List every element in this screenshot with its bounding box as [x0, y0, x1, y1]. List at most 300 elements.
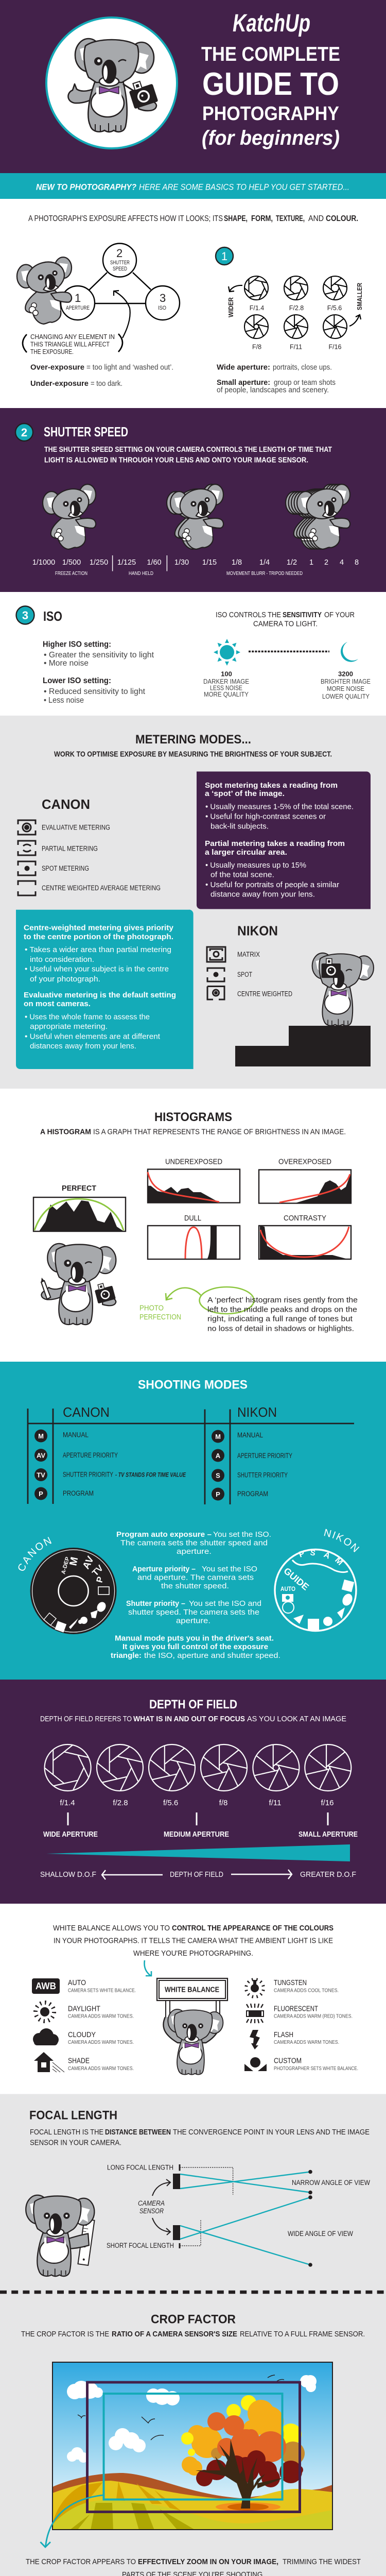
- shutter speed scale: 1/15: [202, 558, 217, 567]
- ISO settings list: • Reduced sensitivity to light: [44, 687, 146, 696]
- icon: shade house: [34, 2052, 64, 2072]
- over and under exposure text: Under-exposure: [30, 380, 89, 388]
- ISO sensitivity note: CAMERA TO LIGHT.: [253, 619, 318, 629]
- panel: metering modes: [0, 716, 386, 1089]
- ISO 3200 labels: [321, 670, 371, 700]
- callout: centre-weighted and evaluative metering: • Uses the whole frame to assess the: [25, 1013, 150, 1021]
- crop factor note: TRIMMING THE WIDEST: [283, 2557, 361, 2566]
- callout: centre-weighted and evaluative metering: into consideration.: [30, 956, 94, 964]
- crop factor illustration: [40, 2362, 333, 2547]
- main title: PHOTOGRAPHY: [202, 103, 339, 125]
- white balance intro: [53, 1924, 334, 1958]
- f-stop labels: f/2.8: [113, 1799, 128, 1807]
- icon: auto white balance: [32, 1978, 60, 1994]
- aperture grid: F/11: [290, 343, 302, 350]
- aperture grid: F/8: [252, 343, 261, 350]
- shutter description: LIGHT IS ALLOWED IN THROUGH YOUR LENS AND ONTO YOUR IMAGE SENSOR.: [44, 455, 308, 465]
- mode descriptions: You set the ISO: [202, 1565, 257, 1573]
- callout: spot and partial metering: back-lit subjects.: [210, 823, 269, 831]
- f-stop labels: f/5.6: [163, 1799, 178, 1807]
- step badge 3: [16, 606, 34, 624]
- header panel: [0, 0, 386, 173]
- modes table: M: [38, 1432, 44, 1440]
- nikon metering labels: [237, 951, 292, 997]
- shutter speed scale: 1/500: [62, 558, 81, 567]
- modes table: SHUTTER PRIORITY: [63, 1470, 113, 1479]
- panel: shutter speed: [0, 408, 386, 592]
- white balance left labels: CAMERA ADDS WARM TONES.: [68, 2013, 134, 2020]
- callout: centre-weighted and evaluative metering: to the centre portion of the photograph.: [24, 933, 173, 941]
- panel: ISO: [16, 606, 371, 705]
- callout: spot and partial metering: Spot metering takes a reading from: [205, 782, 338, 790]
- modes table: AV: [37, 1452, 45, 1459]
- photo perfection label: PERFECTION: [139, 1313, 181, 1321]
- nikon mode dial: NIKON: [324, 1529, 359, 1552]
- chart: contrasty histogram: [259, 1214, 351, 1259]
- chart: dull histogram: DULL: [184, 1214, 201, 1223]
- nikon mode dial: M: [333, 1555, 345, 1567]
- nikon mode dial: P: [298, 1549, 306, 1560]
- exposure triangle diagram: 1: [75, 292, 81, 304]
- intro band: HERE ARE SOME BASICS TO HELP YOU GET STARTED...: [139, 182, 349, 192]
- mode descriptions: shutter speed. The camera sets the: [128, 1608, 259, 1617]
- callout: spot and partial metering: of the total scene.: [210, 871, 274, 879]
- ISO 100 labels: [203, 670, 249, 698]
- focal length diagram: WIDE ANGLE OF VIEW: [288, 2230, 353, 2238]
- triangle note in brackets: [23, 333, 122, 355]
- ISO sensitivity note: SENSITIVITY: [283, 611, 322, 619]
- canon mode dial: CANON: [19, 1537, 51, 1571]
- perfect histogram explanation: right, indicating a full range of tones but: [207, 1315, 353, 1323]
- callout: spot and partial metering: Partial metering takes a reading from: [205, 840, 345, 848]
- mode descriptions: Aperture priority –: [132, 1565, 196, 1573]
- mode descriptions: the shutter speed.: [161, 1582, 229, 1590]
- shutter heading: SHUTTER SPEED: [44, 424, 128, 439]
- depth of field scale: SHALLOW D.O.F: [40, 1871, 96, 1879]
- callout: centre-weighted and evaluative metering: • Useful when elements are at different: [25, 1032, 160, 1041]
- focal length diagram: SENSOR: [139, 2207, 164, 2215]
- depth of field scale: [40, 1870, 356, 1879]
- shutter speed scale: 1/4: [259, 558, 270, 567]
- over and under exposure text: Over-exposure: [30, 364, 84, 372]
- icon: custom: [244, 2057, 267, 2071]
- perfect histogram explanation: left to the middle peaks and drops on the: [207, 1306, 357, 1314]
- callout: spot and partial metering: • Usually measures up to 15%: [205, 861, 306, 870]
- white balance right labels: CAMERA ADDS COOL TONES.: [274, 1988, 339, 1994]
- modes table: P: [216, 1490, 220, 1498]
- modes table: M: [215, 1433, 221, 1440]
- shutter description: [44, 445, 332, 465]
- aperture grid: F/1.4: [250, 304, 264, 312]
- aperture usage text: Small aperture:: [217, 379, 270, 387]
- mode descriptions: triangle:: [111, 1652, 142, 1660]
- aperture usage text: Wide aperture:: [217, 364, 270, 372]
- over and under exposure text: = too light and ‘washed out’.: [86, 364, 173, 372]
- modes table: TV: [37, 1471, 45, 1479]
- chart: contrasty histogram: CONTRASTY: [284, 1214, 326, 1223]
- step badge 1: [216, 247, 233, 265]
- white balance left labels: CAMERA ADDS WARM TONES.: [68, 2065, 134, 2072]
- ISO 3200 labels: 3200: [338, 670, 353, 678]
- perfect histogram explanation: no loss of detail in shadows or highlights.: [207, 1325, 354, 1333]
- depth of field subtitle: DEPTH OF FIELD REFERS TO: [40, 1715, 132, 1723]
- chart: underexposed histogram: UNDEREXPOSED: [165, 1158, 222, 1166]
- metering heading: METERING MODES...: [135, 733, 251, 747]
- koala holding sign: [157, 1978, 227, 2075]
- chart: underexposed histogram: [148, 1158, 240, 1202]
- ISO settings list: • Greater the sensitivity to light: [44, 651, 154, 659]
- canon metering icons: [18, 820, 36, 895]
- chart: overexposed histogram: [259, 1158, 351, 1204]
- mode descriptions: Shutter priority –: [126, 1600, 185, 1608]
- modes table: MANUAL: [237, 1431, 263, 1439]
- modes table: A: [216, 1452, 221, 1460]
- scale captions: FREEZE ACTION: [55, 571, 87, 577]
- white balance right labels: FLUORESCENT: [274, 2005, 318, 2013]
- mode descriptions: The camera sets the shutter speed and: [120, 1539, 268, 1548]
- exposure intro line: SHAPE,: [224, 214, 248, 223]
- focal length description: [30, 2128, 370, 2147]
- mode descriptions: Program auto exposure –: [116, 1531, 212, 1539]
- nikon mode dial: AUTO: [280, 1585, 295, 1592]
- triangle note in brackets: CHANGING ANY ELEMENT IN: [30, 333, 115, 341]
- aperture grid: F/2.8: [289, 304, 304, 312]
- crop factor note: [26, 2557, 361, 2576]
- modes table: NIKON: [237, 1404, 277, 1420]
- intro band: [0, 173, 386, 199]
- shutter speed scale: 1/8: [232, 558, 242, 567]
- shutter speed scale: 4: [340, 558, 344, 567]
- panel: depth of field: [0, 1680, 386, 1904]
- white balance intro: IN YOUR PHOTOGRAPHS. IT TELLS THE CAMERA WHAT THE AMBIENT LIGHT IS LIKE: [54, 1936, 333, 1945]
- canon mode dial: TV: [90, 1563, 106, 1578]
- ISO 3200 labels: BRIGHTER IMAGE: [321, 677, 371, 685]
- exposure triangle diagram: 2: [116, 247, 122, 260]
- crop factor note: EFFECTIVELY ZOOM IN ON YOUR IMAGE,: [138, 2557, 278, 2566]
- aperture usage text: group or team shots: [274, 379, 336, 387]
- f-stop labels: [60, 1799, 334, 1807]
- step badge 2: 2: [21, 426, 27, 439]
- histograms subtitle: IS A GRAPH THAT REPRESENTS THE RANGE OF BRIGHTNESS IN AN IMAGE.: [93, 1128, 346, 1137]
- chart: perfect histogram: PERFECT: [62, 1184, 96, 1193]
- koala with camera on steps: [235, 953, 374, 1066]
- aperture size labels: [43, 1831, 358, 1839]
- ISO settings list: Lower ISO setting:: [43, 676, 111, 685]
- shutter speed scale: 1/2: [287, 558, 297, 567]
- ISO 100 labels: DARKER IMAGE: [203, 677, 249, 685]
- ISO settings list: Higher ISO setting:: [43, 640, 111, 649]
- crop factor description: RELATIVE TO A FULL FRAME SENSOR.: [240, 2330, 365, 2338]
- over and under exposure text: = too dark.: [91, 380, 122, 388]
- aperture usage text: of people, landscapes and scenery.: [217, 386, 329, 395]
- depth of field scale: GREATER D.O.F: [300, 1871, 356, 1879]
- arrow to triangle: [114, 291, 130, 338]
- white balance left labels: [68, 1979, 136, 2072]
- white balance intro: WHITE BALANCE ALLOWS YOU TO: [53, 1924, 170, 1933]
- depth of field scale: DEPTH OF FIELD: [170, 1871, 223, 1879]
- icon: auto white balance: AWB: [36, 1981, 56, 1991]
- modes table: S: [216, 1472, 220, 1480]
- panel: white balance: [32, 1924, 358, 2075]
- shutter speed scale: 1/125: [117, 558, 136, 567]
- callout: centre-weighted and evaluative metering: • Takes a wider area than partial metering: [25, 946, 171, 954]
- callout: centre-weighted and evaluative metering: appropriate metering.: [30, 1023, 108, 1031]
- aperture row: [42, 1740, 351, 1794]
- exposure triangle diagram: 3: [160, 292, 166, 304]
- canon metering labels: PARTIAL METERING: [42, 844, 98, 852]
- main title: (for beginners): [202, 127, 340, 149]
- aperture grid: F/16: [328, 343, 342, 350]
- icon: moon: [341, 642, 358, 662]
- ISO sensitivity note: OF YOUR: [324, 611, 355, 619]
- aperture grid: [227, 274, 363, 350]
- shutter speed scale: 8: [355, 558, 359, 567]
- callout: spot and partial metering: • Usually measures 1-5% of the total scene.: [205, 803, 354, 811]
- chart: dull histogram: [148, 1214, 240, 1259]
- modes table: P: [39, 1490, 43, 1498]
- f-stop labels: f/11: [269, 1799, 281, 1807]
- panel: focal length and crop factor: [0, 2094, 386, 2576]
- icon: flash: [250, 2030, 260, 2049]
- koala sharp: [43, 484, 96, 549]
- green annotation arrow and circle: [166, 1287, 254, 1314]
- aperture size labels: WIDE APERTURE: [43, 1831, 98, 1839]
- focal length diagram: NARROW ANGLE OF VIEW: [292, 2179, 370, 2187]
- canon mode dial: P: [95, 1575, 106, 1584]
- ISO 100 labels: LESS NOISE: [210, 684, 242, 692]
- main title: THE COMPLETE: [201, 43, 340, 65]
- white balance right labels: FLASH: [274, 2031, 293, 2039]
- perfect histogram explanation: [207, 1296, 358, 1333]
- callout: spot and partial metering: a ‘spot’ of the image.: [205, 790, 285, 798]
- ISO settings list: • More noise: [44, 659, 89, 668]
- koala slight blur: [167, 484, 223, 549]
- ISO settings list: [43, 640, 154, 705]
- callout: centre-weighted and evaluative metering: Evaluative metering is the default setting: [24, 991, 176, 999]
- triangle note in brackets: THIS TRIANGLE WILL AFFECT: [30, 341, 110, 348]
- mode descriptions: You set the ISO.: [213, 1531, 271, 1539]
- nikon mode dial: A: [322, 1550, 331, 1561]
- exposure triangle diagram: SPEED: [113, 266, 127, 272]
- callout: spot and partial metering: distance away from your lens.: [210, 890, 315, 899]
- nikon mode dial: GUIDE: [282, 1566, 311, 1592]
- step badge 2: [15, 423, 33, 441]
- icon: tungsten: [244, 1978, 265, 1998]
- modes table: PROGRAM: [63, 1489, 94, 1497]
- aperture grid: F/5.6: [327, 304, 342, 312]
- white balance right labels: CAMERA ADDS WARM TONES.: [274, 2039, 339, 2045]
- aperture grid: WIDER: [227, 297, 235, 317]
- depth wedge: [46, 1844, 350, 1861]
- ISO 3200 labels: LOWER QUALITY: [322, 692, 370, 700]
- koala hugging aperture circle: [17, 257, 72, 324]
- focal length description: DISTANCE BETWEEN: [105, 2128, 171, 2137]
- white balance right labels: CUSTOM: [274, 2057, 302, 2065]
- koala heavy blur: [286, 484, 350, 549]
- histograms heading: HISTOGRAMS: [154, 1110, 232, 1124]
- aperture size labels: SMALL APERTURE: [299, 1831, 358, 1839]
- exposure triangle diagram: SHUTTER: [110, 260, 130, 266]
- icon: sun: [214, 639, 240, 666]
- shutter speed scale: [32, 558, 359, 567]
- nikon metering labels: CENTRE WEIGHTED: [237, 990, 292, 997]
- aperture size labels: MEDIUM APERTURE: [164, 1831, 229, 1839]
- crop factor note: THE CROP FACTOR APPEARS TO: [26, 2557, 136, 2566]
- modes table: APERTURE PRIORITY: [63, 1451, 118, 1459]
- callout: centre-weighted and evaluative metering: on most cameras.: [24, 1000, 91, 1008]
- mode descriptions: aperture.: [176, 1617, 210, 1625]
- canon metering labels: CENTRE WEIGHTED AVERAGE METERING: [42, 884, 161, 892]
- aperture usage text: [217, 364, 336, 395]
- exposure triangle diagram: APERTURE: [66, 305, 90, 311]
- exposure intro line: AND: [308, 214, 324, 223]
- focal length diagram: [107, 2163, 370, 2267]
- exposure intro line: TEXTURE,: [276, 214, 305, 223]
- mode descriptions: Manual mode puts you in the driver's seat.: [115, 1634, 274, 1642]
- callout: spot and partial metering: • Useful for high-contrast scenes or: [205, 812, 326, 821]
- perfect histogram explanation: A ‘perfect’ histogram rises gently from the: [207, 1296, 358, 1304]
- canon mode dial: A-DEP: [60, 1556, 71, 1575]
- ISO 100 labels: MORE QUALITY: [204, 690, 249, 698]
- mascot badge: koala with camera: [46, 18, 177, 148]
- icon: daylight: [36, 2003, 54, 2021]
- shooting modes heading: SHOOTING MODES: [138, 1378, 248, 1392]
- modes table: MANUAL: [63, 1431, 89, 1438]
- aperture usage text: portraits, close ups.: [273, 364, 332, 372]
- white balance left labels: SHADE: [68, 2057, 90, 2065]
- ISO sensitivity note: [216, 611, 355, 629]
- mode descriptions: and aperture. The camera sets: [137, 1573, 254, 1582]
- chart: perfect histogram: [33, 1184, 126, 1231]
- scale captions: [55, 571, 303, 577]
- photo perfection label: PHOTO: [139, 1304, 164, 1313]
- shutter speed scale: 1/60: [147, 558, 162, 567]
- ISO settings list: • Less noise: [44, 696, 84, 705]
- triangle note in brackets: THE EXPOSURE.: [30, 348, 74, 355]
- mode descriptions: It gives you full control of the exposure: [122, 1643, 268, 1651]
- panel: shooting modes: [0, 1362, 386, 1680]
- icon: fluorescent: [247, 2004, 264, 2023]
- intro band: NEW TO PHOTOGRAPHY?: [36, 182, 137, 192]
- crop factor description: THE CROP FACTOR IS THE: [21, 2330, 109, 2338]
- white balance left labels: AUTO: [68, 1979, 86, 1987]
- crop factor description: RATIO OF A CAMERA SENSOR'S SIZE: [112, 2330, 237, 2338]
- white balance right labels: CAMERA ADDS WARM (RED) TONES.: [274, 2013, 353, 2020]
- f-stop labels: f/1.4: [60, 1799, 75, 1807]
- panel: histograms: [33, 1110, 358, 1333]
- shutter description: THE SHUTTER SPEED SETTING ON YOUR CAMERA CONTROLS THE LENGTH OF TIME THAT: [44, 445, 332, 454]
- step badge 1: 1: [221, 250, 227, 263]
- callout: centre-weighted and evaluative metering: distances away from your lens.: [30, 1042, 136, 1050]
- exposure intro line: COLOUR.: [326, 214, 358, 223]
- arrow to sign: [144, 1960, 151, 1976]
- nikon metering labels: SPOT: [237, 971, 252, 978]
- main title: [201, 43, 340, 149]
- canon mode dial: AV: [81, 1554, 96, 1571]
- koala with ruler: [26, 2195, 95, 2276]
- nikon mode dial: S: [309, 1548, 316, 1558]
- icon: cloud: [33, 2028, 59, 2045]
- white balance intro: CONTROL THE APPEARANCE OF THE COLOURS: [172, 1924, 334, 1933]
- ISO 3200 labels: MORE NOISE: [327, 685, 364, 692]
- white balance right labels: [274, 1979, 358, 2072]
- crop factor description: [21, 2330, 365, 2338]
- chart: overexposed histogram: OVEREXPOSED: [278, 1158, 331, 1166]
- depth of field subtitle: WHAT IS IN AND OUT OF FOCUS: [133, 1715, 245, 1723]
- brand logo: KatchUp: [233, 10, 310, 37]
- white balance left labels: CLOUDY: [68, 2031, 96, 2039]
- nikon metering labels: MATRIX: [237, 951, 260, 958]
- focal length diagram: LONG FOCAL LENGTH: [107, 2163, 173, 2171]
- focal length diagram: SHORT FOCAL LENGTH: [107, 2242, 174, 2249]
- shutter speed scale: 1: [309, 558, 313, 567]
- main title: GUIDE TO: [202, 66, 339, 102]
- ISO sensitivity note: ISO CONTROLS THE: [216, 611, 281, 619]
- callout: spot and partial metering: • Useful for portraits of people a similar: [205, 881, 339, 889]
- metering subtitle: WORK TO OPTIMISE EXPOSURE BY MEASURING THE BRIGHTNESS OF YOUR SUBJECT.: [54, 750, 332, 759]
- nikon metering icons: [207, 947, 225, 999]
- koala holding sign: WHITE BALANCE: [165, 1986, 219, 1994]
- canon metering labels: SPOT METERING: [42, 865, 89, 872]
- exposure triangle diagram: ISO: [158, 305, 166, 311]
- modes table: - TV STANDS FOR TIME VALUE: [115, 1471, 186, 1479]
- canon metering heading: CANON: [42, 796, 90, 812]
- f-stop labels: f/16: [321, 1799, 334, 1807]
- callout: centre-weighted and evaluative metering: • Useful when your subject is in the centre: [25, 965, 169, 974]
- aperture grid: SMALLER: [356, 282, 363, 310]
- mode descriptions: [111, 1531, 280, 1660]
- photo perfection label: [139, 1304, 181, 1321]
- white balance left labels: DAYLIGHT: [68, 2005, 100, 2013]
- mode descriptions: aperture.: [177, 1548, 212, 1556]
- white balance left labels: CAMERA SETS WHITE BALANCE.: [68, 1988, 136, 1994]
- depth of field subtitle: [40, 1715, 346, 1723]
- shutter speed scale: 2: [324, 558, 328, 567]
- modes table: CANON: [63, 1404, 110, 1420]
- f-stop labels: f/8: [219, 1799, 227, 1807]
- exposure triangle diagram: [61, 243, 180, 338]
- callout: centre-weighted and evaluative metering: [16, 910, 194, 1069]
- step badge 3: 3: [22, 609, 28, 622]
- white balance intro: WHERE YOU'RE PHOTOGRAPHING.: [133, 1949, 253, 1958]
- crop factor heading: CROP FACTOR: [151, 2312, 236, 2326]
- canon metering labels: EVALUATIVE METERING: [42, 824, 110, 832]
- callout: centre-weighted and evaluative metering: Centre-weighted metering gives priority: [24, 924, 173, 933]
- modes table: SHUTTER PRIORITY: [237, 1471, 288, 1479]
- canon metering labels: [42, 824, 161, 892]
- shutter speed scale: 1/30: [174, 558, 189, 567]
- callout: centre-weighted and evaluative metering: of your photograph.: [30, 975, 100, 984]
- nikon mode dial: [274, 1529, 359, 1632]
- focal length diagram: CAMERA: [138, 2199, 165, 2207]
- callout: spot and partial metering: a larger circular area.: [205, 849, 287, 857]
- ISO 100 labels: 100: [221, 670, 232, 678]
- white balance right labels: TUNGSTEN: [274, 1979, 307, 1987]
- modes table: PROGRAM: [237, 1490, 268, 1498]
- nikon metering heading: NIKON: [237, 923, 278, 939]
- over and under exposure text: [30, 364, 173, 388]
- focal length description: SENSOR IN YOUR CAMERA.: [30, 2139, 121, 2147]
- callout: spot and partial metering: [197, 772, 371, 909]
- mode descriptions: You set the ISO and: [189, 1600, 261, 1608]
- exposure intro line: FORM,: [251, 214, 273, 223]
- scale captions: HAND HELD: [129, 571, 153, 577]
- histograms subtitle: A HISTOGRAM: [40, 1128, 91, 1137]
- canon mode dial: M: [67, 1556, 80, 1567]
- depth of field subtitle: AS YOU LOOK AT AN IMAGE: [247, 1715, 346, 1723]
- white balance right labels: PHOTOGRAPHER SETS WHITE BALANCE.: [274, 2065, 358, 2072]
- canon mode dial: [19, 1537, 117, 1634]
